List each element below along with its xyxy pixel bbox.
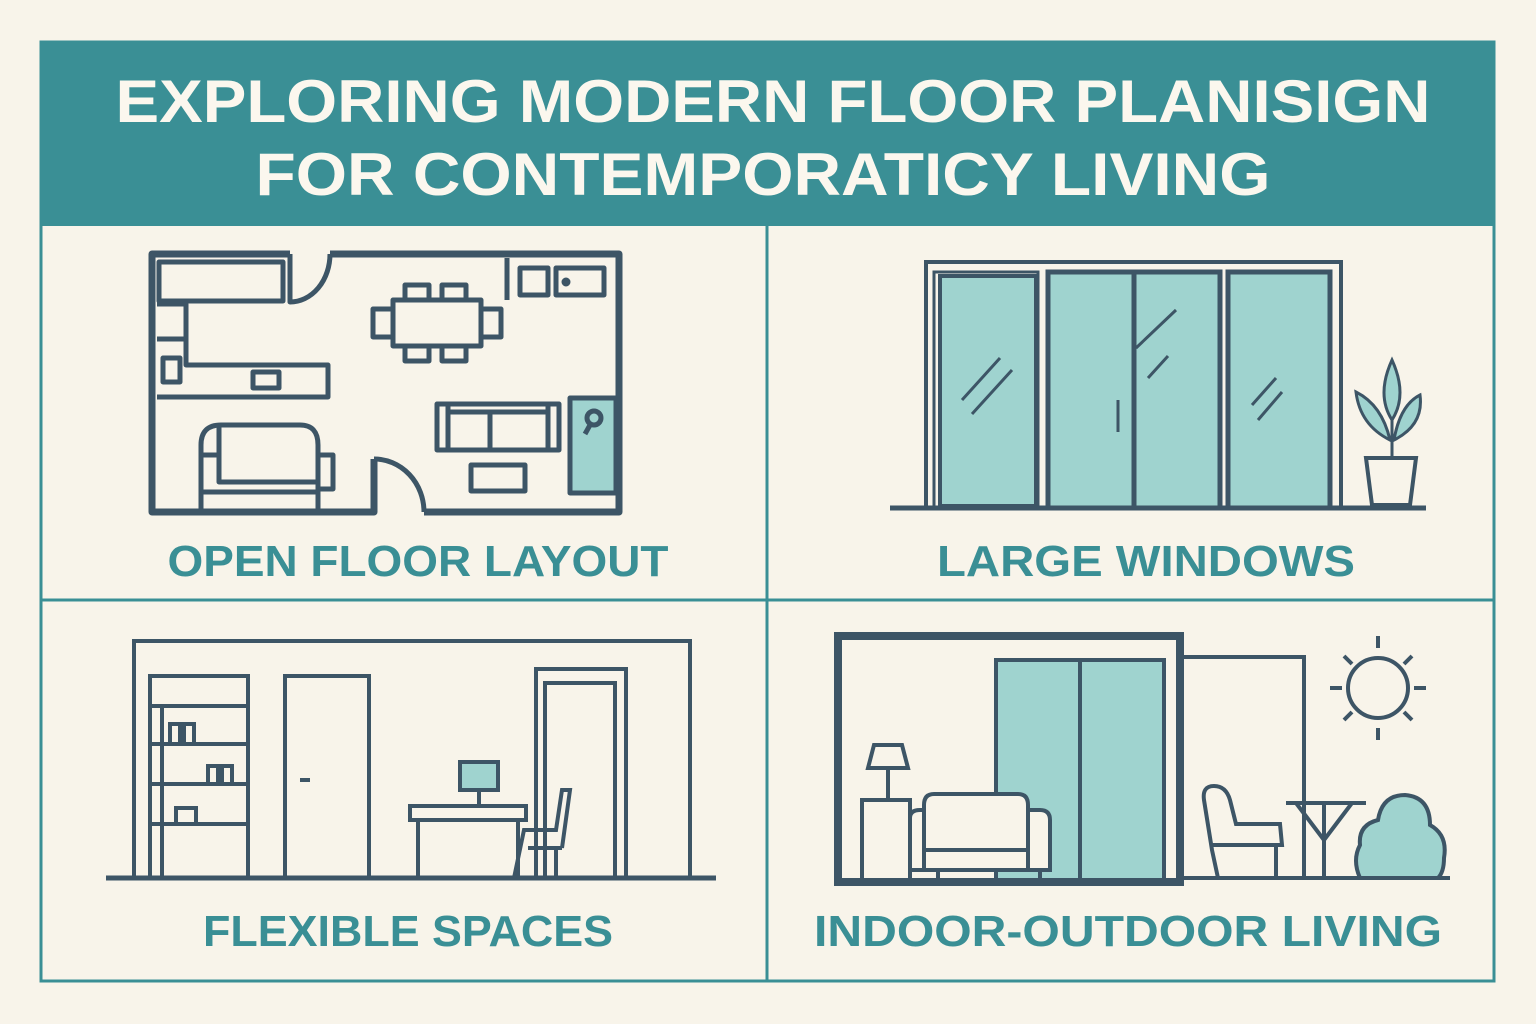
icon: floor plan xyxy=(152,254,619,512)
panel: large windows xyxy=(890,262,1426,586)
title: EXPLORING MODERN FLOOR PLANISIGN xyxy=(116,68,1430,135)
icon: windows xyxy=(890,262,1426,508)
title: FOR CONTEMPORATICY LIVING xyxy=(256,141,1270,208)
panel: indoor-outdoor living xyxy=(814,636,1450,956)
panel: open floor layout xyxy=(152,254,669,586)
panel: flexible spaces xyxy=(106,641,716,956)
icon: indoor-outdoor scene xyxy=(838,636,1450,882)
title banner xyxy=(41,42,1494,226)
label: large windows: LARGE WINDOWS xyxy=(937,537,1355,586)
label: indoor-outdoor living: INDOOR-OUTDOOR LIVING xyxy=(814,907,1442,956)
icon: flexible room xyxy=(106,641,716,878)
label: open floor layout: OPEN FLOOR LAYOUT xyxy=(168,537,669,586)
title xyxy=(116,68,1430,208)
label: flexible spaces: FLEXIBLE SPACES xyxy=(203,907,613,956)
